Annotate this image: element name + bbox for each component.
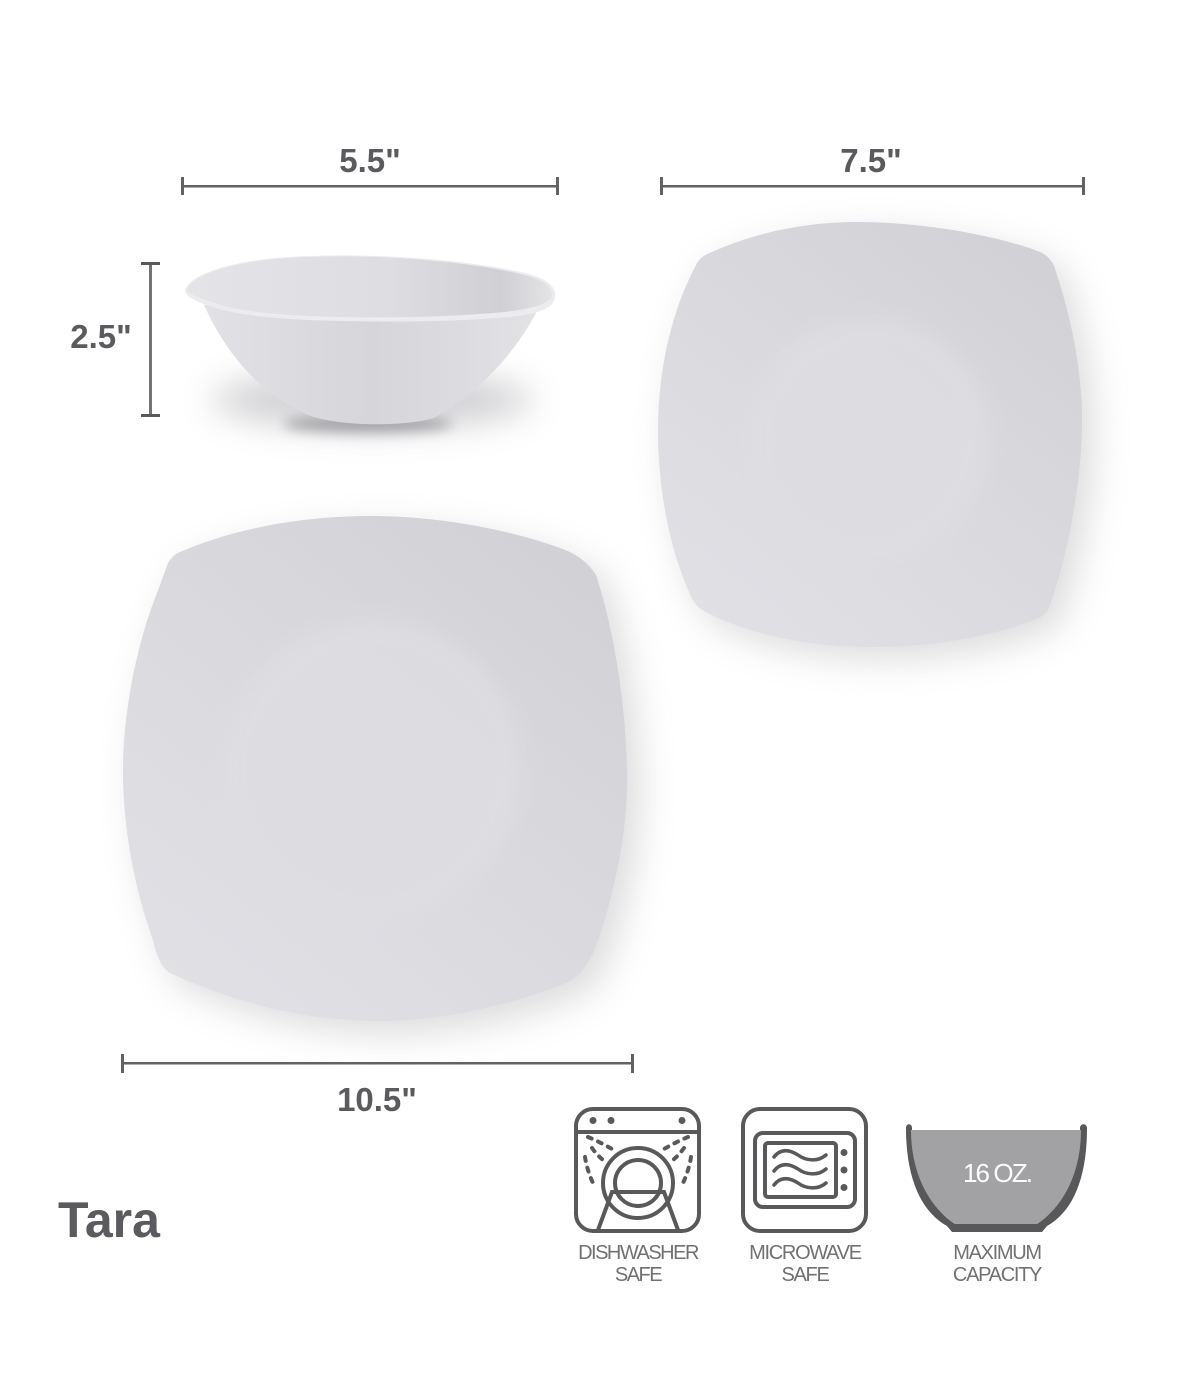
small plate well [746, 318, 990, 562]
large plate well [222, 620, 522, 920]
bowl outer wall [204, 305, 540, 424]
bowl icon outline [906, 1124, 1087, 1232]
label: dishwasher safe: SAFE [615, 1264, 662, 1286]
large plate shadow [136, 529, 640, 1034]
small plate shadow [670, 234, 1094, 659]
title: Tara: Tara [58, 1192, 161, 1248]
label: maximum capacity: CAPACITY [953, 1264, 1042, 1286]
large plate body [123, 516, 627, 1021]
dimension: small plate width 7.5 inches: 7.5" [840, 142, 902, 179]
dimension: bowl height 2.5 inches: 2.5" [70, 318, 132, 355]
dimension: bowl width 5.5 inches [181, 142, 559, 195]
icon: microwave safe [743, 1109, 866, 1231]
bowl interior [187, 256, 552, 317]
icon: bowl capacity 16 oz [906, 1124, 1087, 1232]
bowl shadow [212, 372, 532, 428]
label: microwave safe: SAFE [781, 1264, 829, 1286]
large plate [123, 516, 640, 1034]
small plate [658, 222, 1094, 659]
bowl icon fill [911, 1130, 1081, 1224]
dimension: large plate width 10.5 inches [121, 1054, 634, 1118]
dimension: bowl height 2.5 inches [70, 262, 160, 417]
dimension: small plate width 7.5 inches [660, 142, 1085, 195]
label: maximum capacity: MAXIMUM [953, 1242, 1041, 1264]
capacity value: 16 OZ. [963, 1158, 1031, 1188]
icon: dishwasher safe [576, 1109, 699, 1231]
small plate body [658, 222, 1082, 647]
dimension: large plate width 10.5 inches: 10.5" [337, 1081, 417, 1118]
bowl rim [185, 255, 555, 322]
bowl [185, 255, 555, 433]
label: dishwasher safe: DISHWASHER [578, 1242, 699, 1264]
label: microwave safe: MICROWAVE [749, 1242, 862, 1264]
dimension: bowl width 5.5 inches: 5.5" [339, 142, 401, 179]
